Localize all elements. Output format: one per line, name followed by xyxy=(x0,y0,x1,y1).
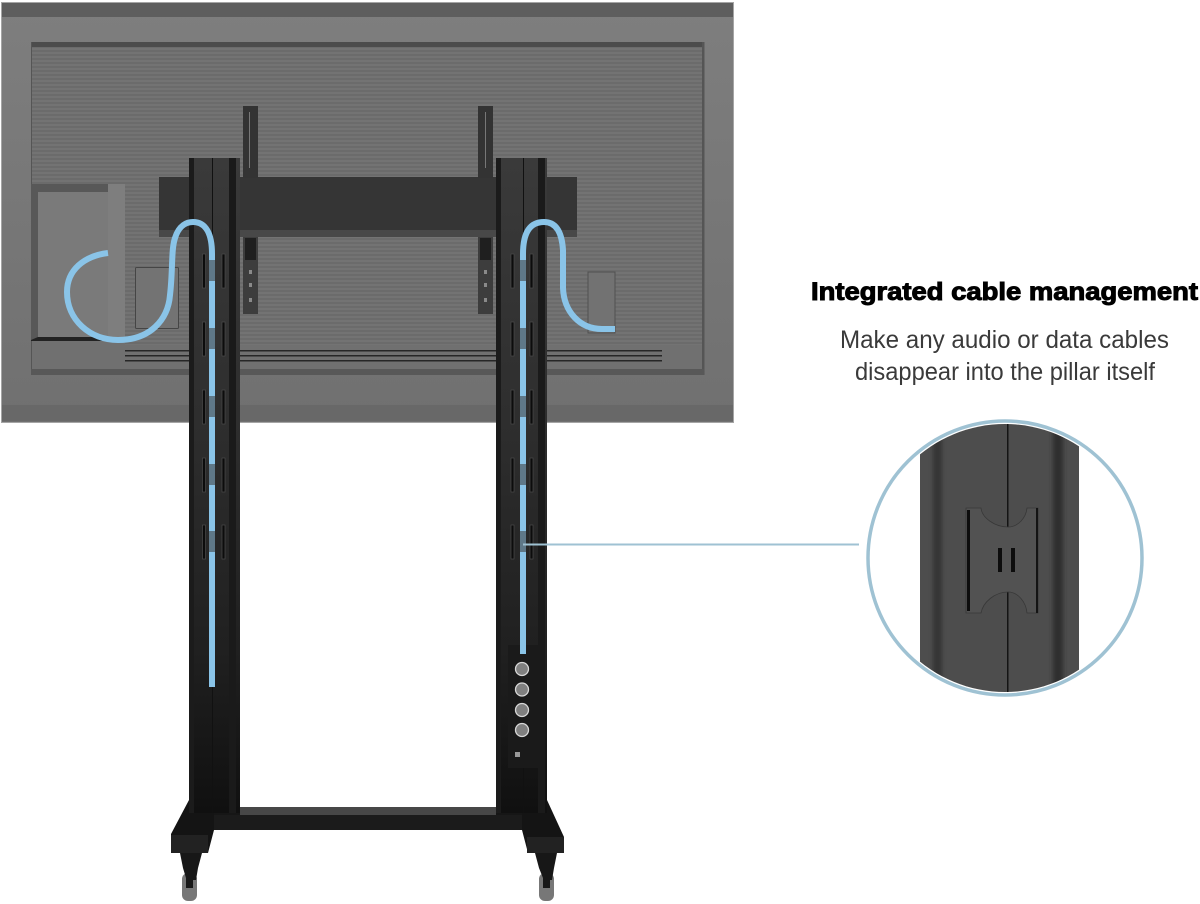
cable gaps at right clips xyxy=(520,260,526,552)
monitor back xyxy=(1,2,734,423)
left caster xyxy=(180,853,202,901)
right lower arm xyxy=(478,237,493,314)
cable gaps at left clips xyxy=(209,260,215,552)
right foot xyxy=(522,800,564,853)
left pillar xyxy=(189,158,240,813)
vent slots xyxy=(125,350,662,362)
description: Make any audio or data cables xyxy=(840,326,1169,354)
port recess left xyxy=(136,268,178,328)
magnified clip detail xyxy=(868,410,1142,706)
outlets xyxy=(516,662,528,736)
right pillar xyxy=(496,158,547,813)
mounting bracket xyxy=(159,106,577,314)
description xyxy=(840,326,1169,386)
floor base xyxy=(171,800,564,901)
right cable xyxy=(523,222,615,654)
left upper arm xyxy=(243,106,258,178)
right pillar clips xyxy=(511,254,533,559)
description: disappear into the pillar itself xyxy=(855,358,1155,386)
left foot xyxy=(171,800,214,853)
left pillar clips xyxy=(202,254,225,559)
left cable xyxy=(67,222,212,687)
callout leader line xyxy=(523,544,859,546)
port recess right xyxy=(588,272,615,333)
crossbar xyxy=(240,807,496,816)
cable clip xyxy=(966,508,1038,613)
left recess xyxy=(31,184,125,341)
right caster xyxy=(535,853,557,901)
right upper arm xyxy=(478,106,493,178)
left lower arm xyxy=(243,237,258,314)
heading: Integrated cable management xyxy=(811,278,1199,306)
outlet panel xyxy=(508,645,538,768)
